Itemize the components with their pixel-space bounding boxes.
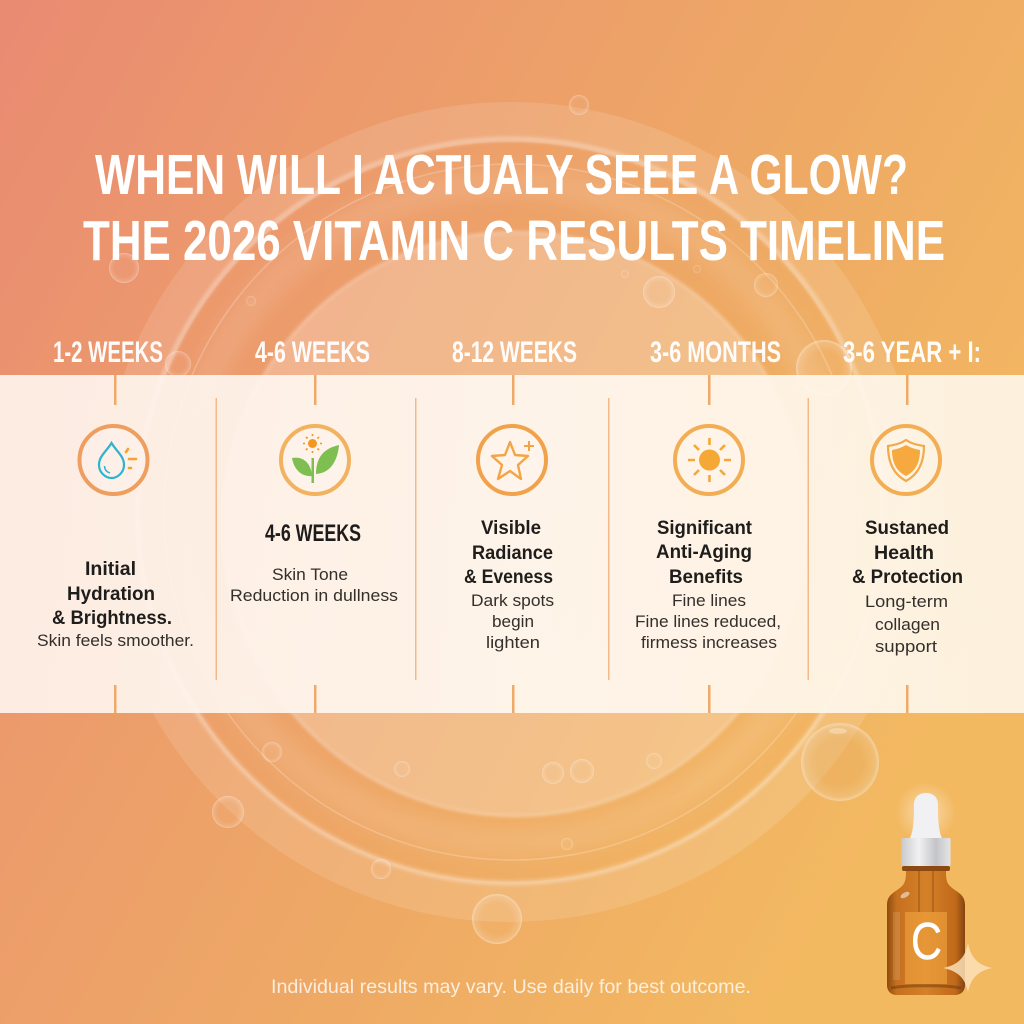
column 4 text: Fine lines <box>672 592 746 610</box>
timeline period labels: 1-2 WEEKS <box>53 336 163 369</box>
column 5 text: support <box>875 638 937 656</box>
background: bubbles <box>109 95 879 944</box>
column 3 text <box>464 518 554 652</box>
column 4 text: Significant <box>657 518 753 539</box>
column 5 text: Long-term <box>865 593 948 611</box>
column 5 text: Sustaned <box>865 518 949 539</box>
column 5 text: & Protection <box>852 567 963 588</box>
column 1 text: Initial <box>85 559 136 580</box>
icon: plant and sun <box>281 426 349 494</box>
timeline period labels: 8-12 WEEKS <box>452 336 577 369</box>
column 5 text: Health <box>874 543 934 564</box>
column 2 text: Skin Tone <box>272 566 348 584</box>
column dividers and tick marks <box>114 375 908 713</box>
column 3 text: begin <box>492 613 534 631</box>
column 4 text: Fine lines reduced, <box>635 613 781 631</box>
timeline panel <box>0 375 1024 713</box>
icon: sun <box>675 426 743 494</box>
serum bottle: C <box>911 913 942 971</box>
column 1 text <box>37 559 194 650</box>
column 5 text <box>852 518 963 656</box>
footer disclaimer: Individual results may vary. Use daily for best outcome. <box>271 977 751 998</box>
title <box>83 143 945 273</box>
timeline period labels: 3-6 MONTHS <box>650 336 781 369</box>
column 3 text: Radiance <box>472 543 553 564</box>
column 1 text: Hydration <box>67 584 155 605</box>
column 2 text <box>230 520 398 605</box>
column 4 text <box>635 518 781 652</box>
timeline period labels: 4-6 WEEKS <box>255 336 370 369</box>
column 1 text: & Brightness. <box>52 608 172 629</box>
column 4 text: Benefits <box>669 567 743 588</box>
column 2 text: Reduction in dullness <box>230 587 398 605</box>
background: serum rings <box>120 122 900 902</box>
column 5 text: collagen <box>875 616 940 634</box>
icon: water drop <box>80 426 148 494</box>
column 1 text: Skin feels smoother. <box>37 632 194 650</box>
column 2 text: 4-6 WEEKS <box>265 520 361 547</box>
serum bottle <box>887 782 965 995</box>
icon: shield <box>872 426 940 494</box>
column 3 text: Dark spots <box>471 592 554 610</box>
column 4 text: firmess increases <box>641 634 777 652</box>
column 3 text: lighten <box>486 634 540 652</box>
column 3 text: Visible <box>481 518 541 539</box>
column 3 text: & Eveness <box>464 567 553 588</box>
icon: star with sparkle <box>478 426 546 494</box>
timeline period labels <box>53 336 981 369</box>
sparkle <box>943 943 992 992</box>
column 4 text: Anti-Aging <box>656 542 752 563</box>
